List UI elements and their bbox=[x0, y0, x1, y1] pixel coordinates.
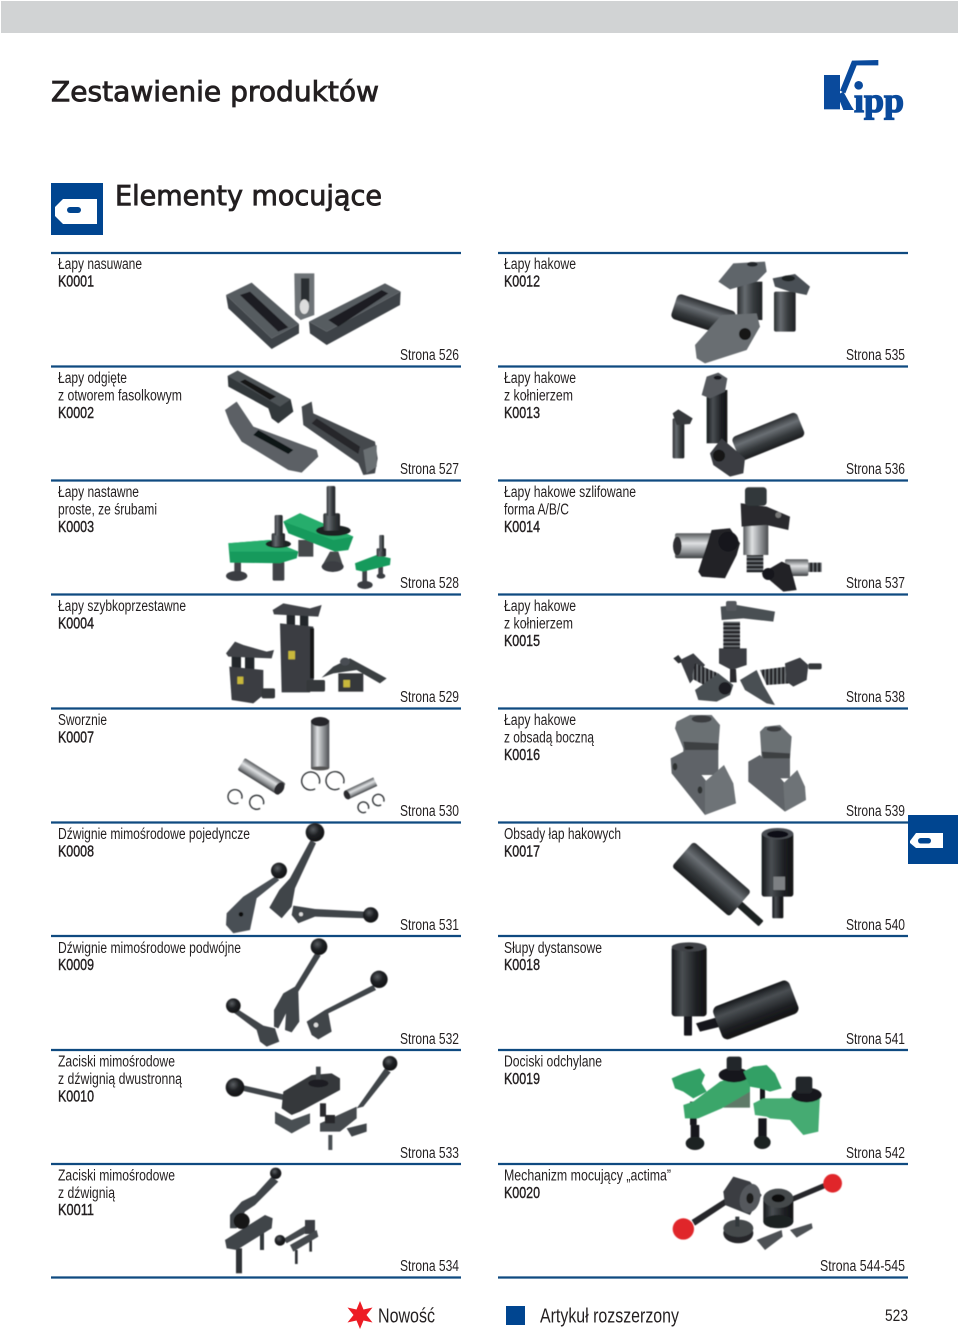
item: K0007: Sworznie bbox=[58, 712, 107, 729]
item: K0011: K0011 bbox=[58, 1202, 94, 1219]
product photo K0008 bbox=[226, 823, 378, 933]
item: K0013: Łapy hakowe bbox=[504, 370, 576, 387]
item: K0004: Strona 529 bbox=[400, 689, 459, 706]
item: K0002: z otworem fasolkowym bbox=[58, 388, 182, 404]
item: K0018: K0018 bbox=[504, 957, 540, 974]
item: K0003 bbox=[51, 480, 461, 592]
product photo K0004 bbox=[226, 603, 387, 703]
item: K0011: Zaciski mimośrodowe bbox=[58, 1168, 175, 1184]
product photo K0015 bbox=[673, 601, 822, 705]
item: K0020: Strona 544-545 bbox=[820, 1258, 905, 1275]
item: K0008 bbox=[51, 822, 461, 934]
item: K0014: Strona 537 bbox=[846, 575, 905, 592]
logo: Kipp bbox=[824, 60, 904, 120]
item: K0017: K0017 bbox=[504, 844, 540, 860]
item: K0011: z dźwignią bbox=[58, 1185, 115, 1202]
product photo K0019 bbox=[672, 1057, 822, 1150]
product photo K0011 bbox=[225, 1168, 318, 1273]
item: K0016: K0016 bbox=[504, 747, 540, 764]
item: K0011: Strona 534 bbox=[400, 1258, 459, 1275]
item: K0015 bbox=[498, 594, 908, 706]
section heading: Elementy mocujące bbox=[115, 179, 382, 212]
item: K0004 bbox=[51, 594, 461, 706]
item: K0001: Łapy nasuwane bbox=[58, 256, 142, 273]
item: K0016 bbox=[498, 708, 908, 820]
item: K0019: Strona 542 bbox=[846, 1145, 905, 1162]
item: K0002: Strona 527 bbox=[400, 461, 459, 478]
item: K0012 bbox=[498, 253, 908, 364]
item: K0001: K0001 bbox=[58, 274, 94, 290]
item: K0011 bbox=[51, 1164, 461, 1278]
item: K0013 bbox=[498, 366, 908, 478]
item: K0001 bbox=[51, 253, 461, 364]
top grey band bbox=[1, 1, 958, 33]
item: K0016: Strona 539 bbox=[846, 803, 905, 820]
item: K0014: K0014 bbox=[504, 519, 540, 536]
item: K0017 bbox=[498, 822, 908, 934]
item: K0013: z kołnierzem bbox=[504, 388, 573, 404]
item: K0010: z dźwignią dwustronną bbox=[58, 1071, 182, 1088]
item: K0016: z obsadą boczną bbox=[504, 730, 594, 746]
item: K0018: Słupy dystansowe bbox=[504, 940, 602, 957]
product photo K0012 bbox=[670, 262, 810, 363]
item: K0003: proste, ze śrubami bbox=[58, 502, 157, 518]
item: K0020 bbox=[498, 1164, 908, 1278]
page number: 523 bbox=[885, 1306, 908, 1325]
item: K0003: K0003 bbox=[58, 519, 94, 536]
product photo K0018 bbox=[672, 942, 800, 1041]
side tab icon bbox=[908, 815, 958, 864]
item: K0010: Strona 533 bbox=[400, 1145, 459, 1162]
item: K0015: z kołnierzem bbox=[504, 616, 573, 632]
item: K0015: Łapy hakowe bbox=[504, 598, 576, 615]
item: K0001: Strona 526 bbox=[400, 347, 459, 364]
item: K0003: Strona 528 bbox=[400, 575, 459, 592]
item: K0012: K0012 bbox=[504, 274, 540, 290]
item: K0008: K0008 bbox=[58, 844, 94, 860]
item: K0009: Dźwignie mimośrodowe podwójne bbox=[58, 940, 241, 957]
product photo K0003 bbox=[226, 486, 391, 589]
product photo K0016 bbox=[671, 715, 806, 815]
item: K0020: Mechanizm mocujący „actima” bbox=[504, 1168, 671, 1184]
legend: new item star: Nowość bbox=[378, 1306, 435, 1328]
product photo K0020 bbox=[673, 1174, 842, 1250]
item: K0015: K0015 bbox=[504, 633, 540, 650]
item: K0010 bbox=[51, 1050, 461, 1162]
item: K0012: Strona 535 bbox=[846, 347, 905, 364]
title: Zestawienie produktów bbox=[51, 75, 379, 108]
product photo K0013 bbox=[673, 373, 806, 477]
item: K0009 bbox=[51, 936, 461, 1048]
logo: Kipp: ıpp bbox=[854, 82, 904, 120]
item: K0014: Łapy hakowe szlifowane bbox=[504, 484, 636, 501]
item: K0002: Łapy odgięte bbox=[58, 370, 127, 387]
item: K0018: Strona 541 bbox=[846, 1031, 905, 1048]
item: K0002 bbox=[51, 366, 461, 478]
product photo K0017 bbox=[672, 828, 793, 926]
section icon: clamping element bbox=[51, 183, 103, 235]
item: K0019 bbox=[498, 1050, 908, 1162]
product photo K0007 bbox=[225, 717, 386, 815]
item: K0008: Dźwignie mimośrodowe pojedyncze bbox=[58, 826, 250, 843]
item: K0013: Strona 536 bbox=[846, 461, 905, 478]
item: K0020: K0020 bbox=[504, 1185, 540, 1202]
product photo K0002 bbox=[225, 371, 378, 475]
item: K0003: Łapy nastawne bbox=[58, 484, 139, 501]
item: K0019: K0019 bbox=[504, 1071, 540, 1088]
item: K0019: Dociski odchylane bbox=[504, 1054, 602, 1070]
product photo K0010 bbox=[226, 1056, 397, 1150]
item: K0010: K0010 bbox=[58, 1088, 94, 1106]
item: K0002: K0002 bbox=[58, 405, 94, 422]
item: K0012: Łapy hakowe bbox=[504, 256, 576, 273]
item: K0007: Strona 530 bbox=[400, 803, 459, 820]
legend: extended item square bbox=[506, 1306, 679, 1328]
product photo K0001 bbox=[226, 273, 401, 349]
item: K0004: Łapy szybkoprzestawne bbox=[58, 598, 186, 615]
item: K0015: Strona 538 bbox=[846, 689, 905, 706]
item: K0018 bbox=[498, 936, 908, 1048]
item: K0017: Strona 540 bbox=[846, 917, 905, 934]
item: K0014 bbox=[498, 480, 908, 592]
item: K0008: Strona 531 bbox=[400, 917, 459, 934]
product photo K0014 bbox=[673, 487, 822, 592]
item: K0007 bbox=[51, 708, 461, 820]
item: K0004: K0004 bbox=[58, 616, 94, 632]
item: K0009: K0009 bbox=[58, 957, 94, 974]
item: K0016: Łapy hakowe bbox=[504, 712, 576, 729]
item: K0017: Obsady łap hakowych bbox=[504, 826, 621, 843]
item: K0014: forma A/B/C bbox=[504, 502, 569, 518]
item: K0013: K0013 bbox=[504, 405, 540, 422]
product photo K0009 bbox=[226, 938, 388, 1047]
item: K0009: Strona 532 bbox=[400, 1031, 459, 1048]
legend: new item star bbox=[348, 1301, 435, 1329]
item: K0007: K0007 bbox=[58, 730, 94, 746]
legend: extended item square: Artykuł rozszerzony bbox=[540, 1306, 679, 1328]
item: K0010: Zaciski mimośrodowe bbox=[58, 1054, 175, 1070]
